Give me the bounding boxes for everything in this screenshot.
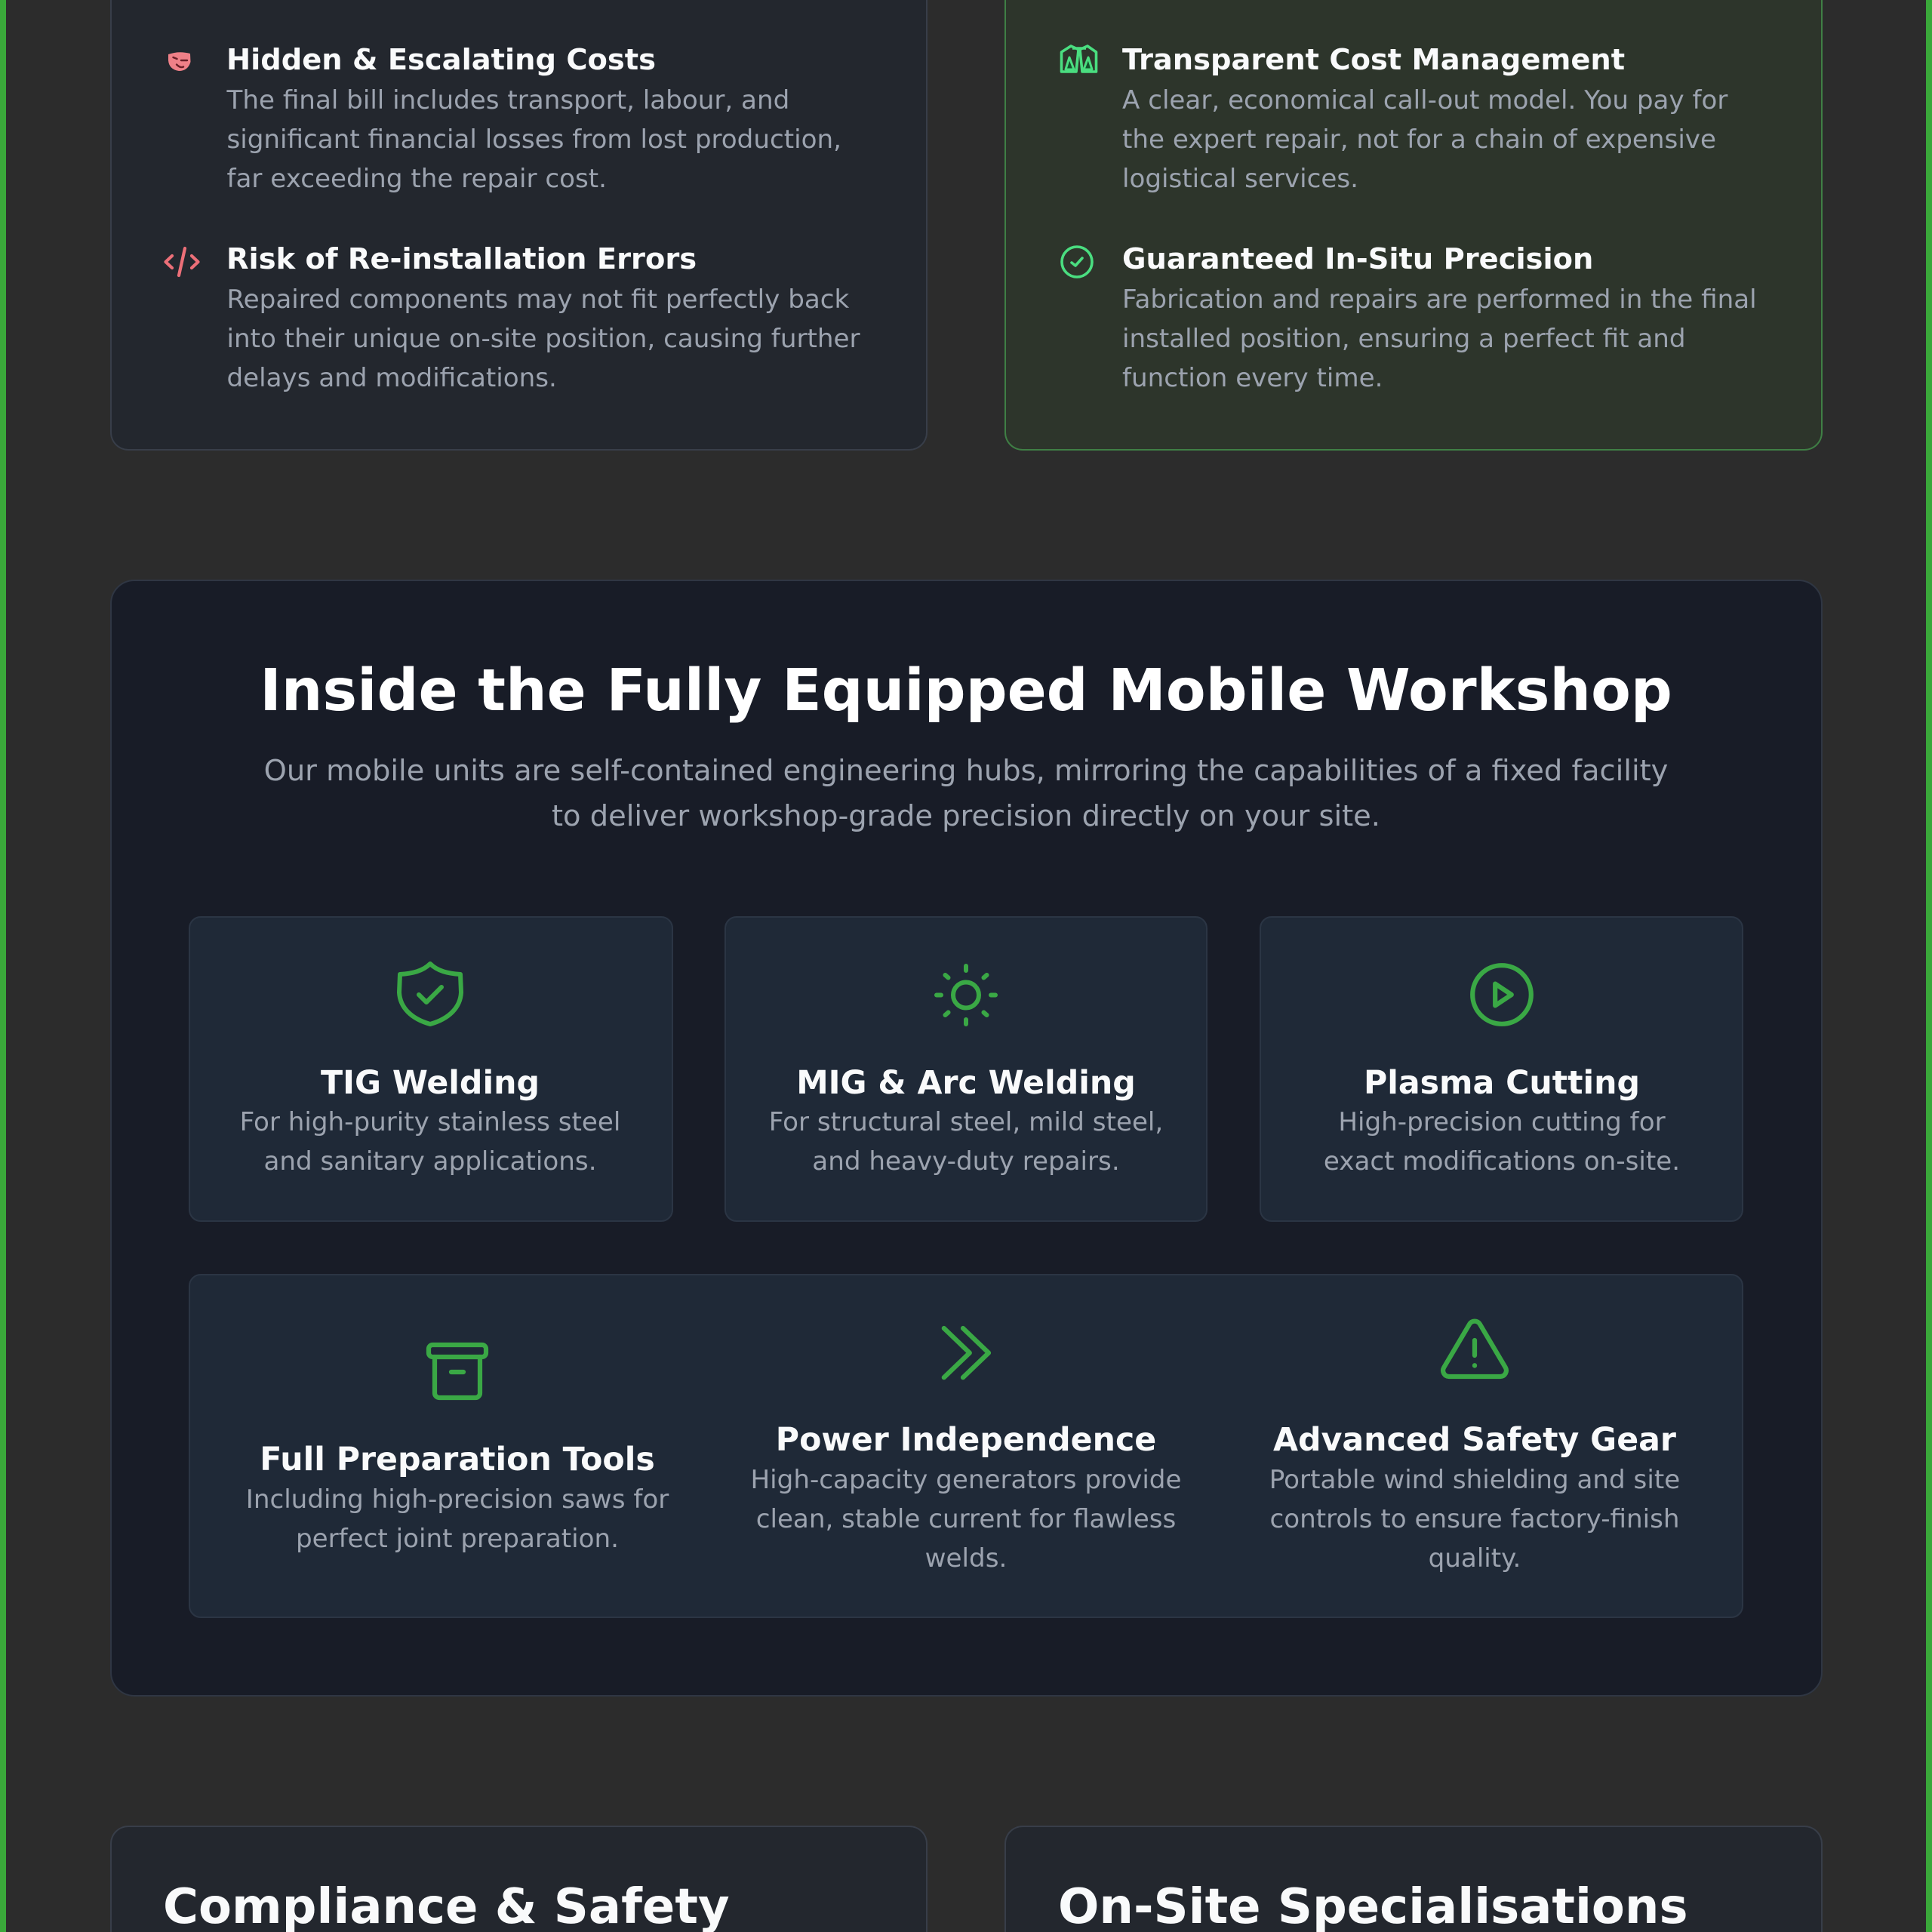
item text: in-situ precision: [1122, 285, 1757, 393]
icon: shield check: [397, 961, 463, 1026]
subtitle: mobile workshop: Our mobile units are self-contained engineering hubs, mirroring the capabilities of a fixed facility: [264, 754, 1668, 788]
item title: re-installation: Risk of Re-installation Errors: [226, 242, 697, 276]
card title: MIG: MIG & Arc Welding: [796, 1064, 1136, 1102]
item text: in-situ precision: Fabrication and repairs are performed in the final: [1122, 285, 1757, 315]
card: workshop support row: [189, 1274, 1743, 1618]
card text: MIG: and heavy-duty repairs.: [812, 1146, 1120, 1177]
icon: sun: [934, 964, 998, 1026]
item text: hidden costs: [226, 85, 841, 194]
item title: hidden costs: Hidden & Escalating Costs: [226, 43, 656, 77]
heading: mobile workshop: Inside the Fully Equipped Mobile Workshop: [260, 657, 1672, 724]
item text: in-situ precision: installed position, ensuring a perfect fit and: [1122, 324, 1686, 354]
card text: power: welds.: [925, 1543, 1007, 1574]
panel: compliance and safety: [110, 1826, 928, 1932]
card text: power: [751, 1465, 1181, 1574]
card text: plasma: [1324, 1107, 1680, 1177]
card text: TIG: For high-purity stainless steel: [240, 1107, 620, 1137]
icon: archive box: [426, 1342, 489, 1401]
icon: double chevron: [942, 1325, 992, 1380]
side accent bar: right: [1926, 0, 1932, 1932]
panel: on-site specialisations: [1004, 1826, 1823, 1932]
icon: check circle: [1060, 245, 1094, 278]
card title: safety: Advanced Safety Gear: [1273, 1421, 1676, 1459]
subtitle: mobile workshop: [264, 754, 1668, 833]
card title: plasma: Plasma Cutting: [1364, 1064, 1640, 1102]
card text: plasma: High-precision cutting for: [1338, 1107, 1666, 1137]
panel: traditional repair drawbacks: [110, 0, 928, 451]
card text: safety: [1269, 1465, 1680, 1574]
item text: in-situ precision: function every time.: [1122, 363, 1383, 393]
item text: re-installation: Repaired components may not fit perfectly back: [226, 285, 849, 315]
card text: preparation: [246, 1484, 669, 1554]
card text: safety: controls to ensure factory-finish: [1269, 1504, 1680, 1534]
card: plasma cutting: [1260, 916, 1743, 1222]
card text: preparation: perfect joint preparation.: [296, 1524, 619, 1554]
item text: transparent cost: [1122, 85, 1728, 194]
icon: play circle: [1470, 963, 1534, 1026]
icon: balance scales: [1060, 45, 1097, 73]
item title: in-situ precision: Guaranteed In-Situ Precision: [1122, 242, 1593, 276]
card text: plasma: exact modifications on-site.: [1324, 1146, 1680, 1177]
item text: transparent cost: logistical services.: [1122, 164, 1358, 194]
subtitle: mobile workshop: to deliver workshop-grade precision directly on your site.: [552, 799, 1380, 833]
icon: code brackets: [164, 246, 200, 278]
item title: transparent cost: Transparent Cost Management: [1122, 43, 1625, 77]
card text: TIG: [240, 1107, 620, 1177]
card title: preparation: Full Preparation Tools: [260, 1441, 655, 1478]
card title: TIG: TIG Welding: [321, 1064, 540, 1102]
card: MIG and arc welding: [724, 916, 1208, 1222]
item text: transparent cost: the expert repair, not for a chain of expensive: [1122, 125, 1716, 155]
item text: hidden costs: The final bill includes transport, labour, and: [226, 85, 789, 115]
item text: transparent cost: A clear, economical call-out model. You pay for: [1122, 85, 1727, 115]
card text: preparation: Including high-precision saws for: [246, 1484, 669, 1515]
icon: cost mask: [168, 52, 190, 71]
item text: re-installation: into their unique on-site position, causing further: [226, 324, 860, 354]
card text: TIG: and sanitary applications.: [263, 1146, 597, 1177]
card text: power: clean, stable current for flawless: [756, 1504, 1176, 1534]
panel: mobile workshop section: [110, 580, 1823, 1697]
card text: MIG: For structural steel, mild steel,: [769, 1107, 1163, 1137]
side accent bar: left: [0, 0, 6, 1932]
icon: warning triangle: [1440, 1319, 1509, 1380]
card text: safety: quality.: [1429, 1543, 1521, 1574]
item text: re-installation: [226, 285, 860, 393]
card: TIG welding: [189, 916, 673, 1222]
card title: power: Power Independence: [776, 1421, 1156, 1459]
panel: mobile workshop benefits: [1004, 0, 1823, 451]
card text: safety: Portable wind shielding and site: [1269, 1465, 1680, 1495]
item text: hidden costs: significant financial losses from lost production,: [226, 125, 841, 155]
item text: re-installation: delays and modifications.: [226, 363, 557, 393]
card text: MIG: [769, 1107, 1163, 1177]
card text: power: High-capacity generators provide: [751, 1465, 1181, 1495]
item text: hidden costs: far exceeding the repair cost.: [226, 164, 607, 194]
